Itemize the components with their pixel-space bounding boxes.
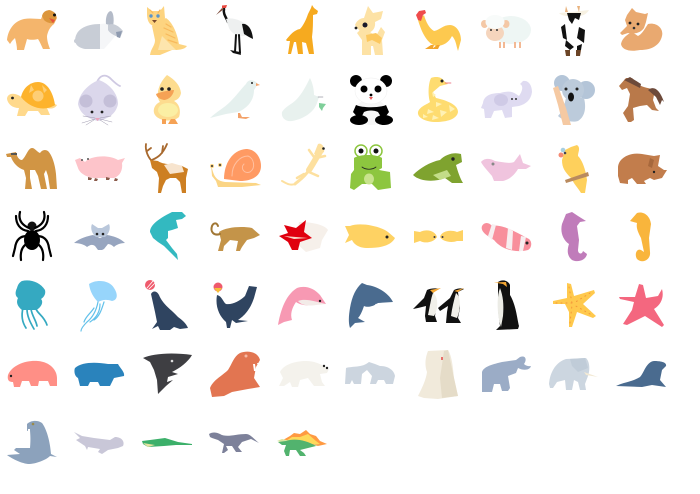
- icon: blue dolphin: [349, 283, 393, 328]
- icon: lilac elephant: [481, 81, 532, 118]
- icon: tall penguin: [494, 280, 519, 330]
- icon: spider: [13, 212, 51, 260]
- icon: dog: [7, 10, 57, 50]
- icon: two penguins: [413, 288, 464, 323]
- icon: yellow fish: [345, 224, 395, 248]
- icon: dove with leaf: [282, 78, 326, 121]
- icon: blue hippo: [74, 363, 124, 386]
- icon: green frog: [350, 145, 391, 190]
- icon: pair of polar bears: [345, 362, 395, 384]
- icon: parrot: [558, 145, 589, 193]
- icon: giraffe: [286, 5, 318, 54]
- icon: teal jellyfish: [16, 280, 47, 329]
- icon: cat: [147, 6, 187, 55]
- icon: blue-grey elephant: [482, 357, 531, 392]
- icon: dark seal: [616, 361, 666, 387]
- icon: pale crocodile: [74, 432, 124, 454]
- icon: kissing fish: [414, 230, 463, 243]
- icon: spotted deer: [146, 144, 188, 193]
- icon: turtle: [7, 82, 57, 116]
- icon: tree frog: [413, 153, 463, 183]
- icon: camel: [6, 148, 57, 189]
- icon: light blue jellyfish: [81, 281, 117, 331]
- icon: purple seahorse: [561, 212, 587, 261]
- icon: pink dolphin: [481, 154, 531, 181]
- icon: standing polar bears: [418, 350, 458, 399]
- icon: horse: [619, 77, 664, 122]
- icon: snake: [418, 77, 458, 122]
- icon: fawn: [355, 6, 385, 55]
- icon: stegosaurus: [277, 430, 327, 456]
- icon: cow: [559, 6, 589, 56]
- icon: pink starfish: [619, 284, 664, 327]
- icon: koala: [553, 75, 595, 125]
- icon: iguana: [150, 212, 186, 260]
- icon: seal with ball: [145, 280, 188, 330]
- icon: yellow starfish: [553, 283, 596, 327]
- icon: duck: [154, 75, 181, 124]
- icon: seal with ball, arched: [214, 282, 257, 328]
- icon: pink dolphin leaping: [278, 287, 326, 325]
- icon: sea lion: [7, 421, 57, 464]
- icon: gecko: [282, 144, 325, 185]
- icon: crane: [216, 5, 253, 55]
- icon: snail: [210, 149, 261, 187]
- icon: rabbit: [74, 11, 123, 49]
- icon: panda: [350, 75, 393, 125]
- icon: red and white fish: [279, 220, 328, 252]
- icon: bat: [74, 224, 125, 250]
- icon: rhino: [618, 154, 667, 184]
- icon: squirrel: [620, 8, 662, 51]
- icon: shark: [143, 354, 192, 394]
- icon: rooster: [416, 10, 461, 51]
- icon: walrus: [210, 352, 260, 397]
- icon: green crocodile: [142, 438, 192, 447]
- icon: sheep: [481, 15, 531, 48]
- icon: pig: [75, 156, 125, 181]
- icon: mouse: [78, 76, 120, 125]
- icon: grey dinosaur: [209, 432, 259, 453]
- icon: orange seahorse: [630, 213, 651, 261]
- icon: clownfish: [482, 223, 531, 251]
- icon: pigeon: [210, 80, 260, 119]
- icon: leopard: [211, 223, 260, 251]
- icon: polar bear: [279, 361, 329, 387]
- icon: pink hippo: [8, 361, 57, 387]
- icon: pale elephant: [549, 358, 598, 390]
